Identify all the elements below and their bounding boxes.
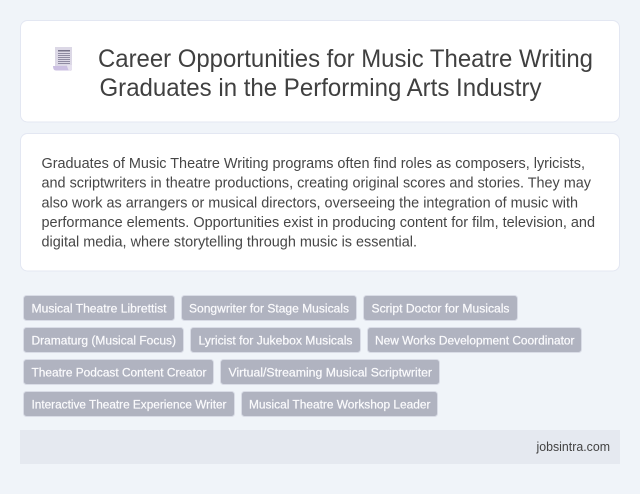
tag: Lyricist for Jukebox Musicals: Lyricist for Jukebox Musicals — [198, 334, 352, 348]
tag: Virtual/Streaming Musical Scriptwriter — [220, 360, 440, 384]
tag: Interactive Theatre Experience Writer — [24, 392, 234, 416]
text block: description: digital media, where storytelling through music is essential. — [42, 234, 417, 250]
heading: title: Career Opportunities for Music Theatre Writing — [98, 45, 593, 73]
tag: Musical Theatre Workshop Leader: Musical Theatre Workshop Leader — [249, 398, 430, 412]
text block: description: Graduates of Music Theatre Writing programs often find roles as composers, lyricists, — [42, 156, 585, 172]
text block: description: also work as arrangers or musical directors, overseeing the integration of music with — [42, 196, 578, 212]
tag: Dramaturg (Musical Focus): Dramaturg (Musical Focus) — [32, 334, 176, 348]
tag: Musical Theatre Librettist — [24, 296, 174, 320]
icon: scroll document — [53, 47, 72, 71]
heading: title: Graduates in the Performing Arts Industry — [100, 74, 542, 102]
heading: title — [98, 45, 593, 102]
tag: Songwriter for Stage Musicals — [182, 296, 356, 320]
tag: Songwriter for Stage Musicals: Songwriter for Stage Musicals — [189, 302, 349, 316]
text block: description: and scriptwriters in theatre productions, creating original scores and stories. They may — [42, 176, 592, 192]
text block: description — [42, 156, 595, 250]
tag: Dramaturg (Musical Focus) — [24, 328, 184, 352]
tag: Theatre Podcast Content Creator: Theatre Podcast Content Creator — [32, 366, 206, 380]
tag: Musical Theatre Workshop Leader — [242, 392, 438, 416]
tag: Virtual/Streaming Musical Scriptwriter: Virtual/Streaming Musical Scriptwriter — [228, 366, 432, 380]
footer: source bar — [20, 430, 620, 464]
panel: title header — [20, 20, 620, 122]
tag: New Works Development Coordinator: New Works Development Coordinator — [375, 334, 574, 348]
panel: job tags — [24, 296, 582, 416]
tag: Musical Theatre Librettist: Musical Theatre Librettist — [32, 302, 167, 316]
panel: description — [20, 134, 620, 271]
tag: Theatre Podcast Content Creator — [24, 360, 214, 384]
text block: description: performance elements. Opportunities exist in producing content for film, television, and — [42, 215, 595, 231]
tag: Script Doctor for Musicals — [364, 296, 518, 320]
tag: Interactive Theatre Experience Writer: Interactive Theatre Experience Writer — [32, 398, 226, 412]
tag: New Works Development Coordinator — [368, 328, 582, 352]
footer: source bar: jobsintra.com — [536, 440, 610, 454]
tag: Lyricist for Jukebox Musicals — [190, 328, 360, 352]
tag: Script Doctor for Musicals: Script Doctor for Musicals — [372, 302, 510, 316]
